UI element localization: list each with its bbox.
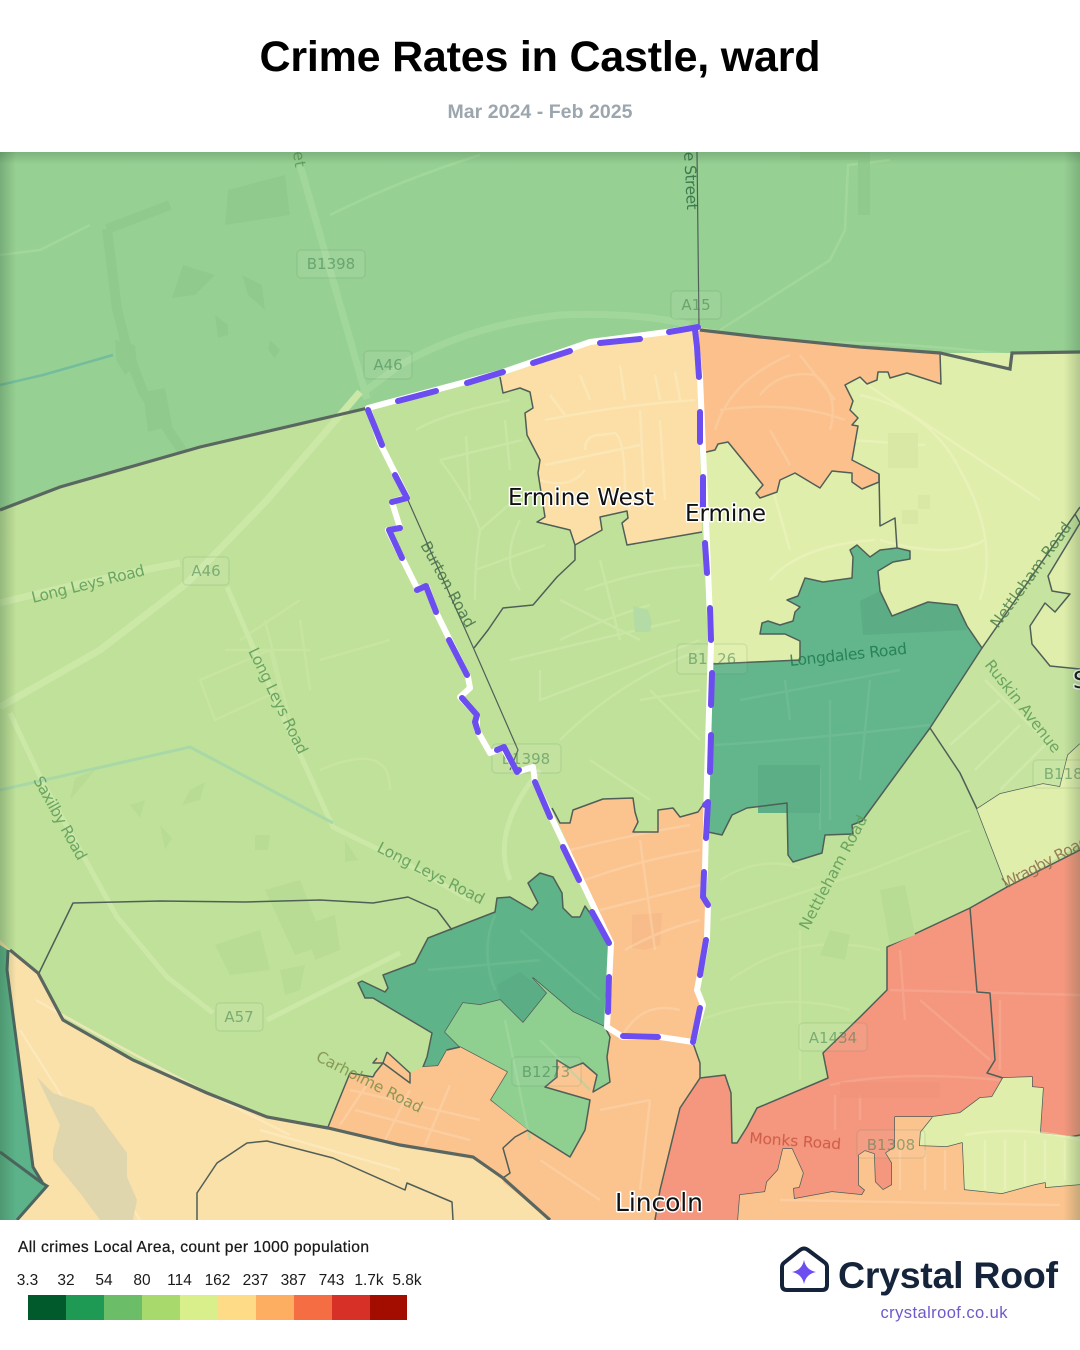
region boundary lines on main green: [39, 897, 452, 973]
legend colour scale: [28, 1295, 407, 1320]
road shields: A46: [191, 562, 221, 580]
icon: school building patch: [633, 606, 652, 632]
street name labels: Burton Road: [417, 538, 479, 631]
legend tick values: 743: [319, 1272, 344, 1289]
legend tick values: 5.8k: [392, 1272, 422, 1289]
region: Monks Road red wards: [655, 850, 1080, 1220]
street name labels: Nettleham Road: [796, 812, 871, 933]
ward boundary: purple dashes: [368, 327, 712, 1042]
road shields: B1308: [867, 1136, 915, 1154]
region: Ermine West pale orange ward: [474, 328, 702, 648]
title: Crime Rates in Castle, ward: [260, 33, 820, 81]
region: south dark-green ward: [358, 873, 611, 1067]
field patches: [824, 933, 915, 946]
region: Ermine orange ward: [698, 328, 941, 548]
legend tick values: 237: [243, 1272, 268, 1289]
region: south-centre orange ward: [503, 798, 707, 1220]
street name labels: et: [289, 150, 309, 168]
street name labels: Long Leys Road: [244, 645, 311, 757]
choropleth map panel: [0, 150, 1080, 1220]
thick district boundary: [0, 330, 1080, 1220]
legend tick values: 162: [205, 1272, 230, 1289]
region: east yellow-green wards: [706, 353, 1080, 668]
legend tick values: 1.7k: [354, 1272, 384, 1289]
region: mid-green ward: [445, 978, 610, 1157]
region: Carholme orange ward: [328, 1047, 528, 1178]
street name labels: Carholme Road: [313, 1048, 426, 1117]
street name labels: Long Leys Road: [374, 839, 487, 908]
region: south yellow sub-area boundary: [197, 1141, 453, 1220]
region: north rural low-crime area: [0, 152, 1080, 510]
place labels: [508, 485, 1080, 1217]
region: Ruskin Avenue ward: [930, 514, 1080, 887]
road shields: B1398: [502, 750, 550, 768]
map edge shading: [0, 152, 1080, 1220]
legend tick values: 3.3: [17, 1272, 38, 1289]
legend tick values: [17, 1272, 422, 1289]
ward boundary: white outline: [368, 327, 711, 1042]
road shields: B1126: [688, 650, 736, 668]
major roads on the main green: [0, 390, 542, 1022]
region: south-east yellow-green pocket: [919, 1077, 1080, 1194]
legend tick values: 80: [133, 1272, 151, 1289]
road shields: B1273: [522, 1063, 570, 1081]
region: north-west ward streets: [416, 400, 700, 800]
street name labels: Monks Road: [749, 1129, 842, 1153]
road shields: B1398: [307, 255, 355, 273]
place labels: Ermine: [685, 501, 766, 527]
street name labels: Nettleham Road: [987, 519, 1075, 631]
legend tick values: 32: [57, 1272, 75, 1289]
road shields: A15: [681, 296, 711, 314]
date range subtitle: Mar 2024 - Feb 2025: [448, 101, 633, 123]
street name labels: Ruskin Avenue: [981, 656, 1065, 757]
legend tick values: 387: [281, 1272, 306, 1289]
region: Longdales dark-green ward: [708, 507, 1080, 862]
lake: [37, 1077, 137, 1220]
legend heading: All crimes Local Area, count per 1000 population: [18, 1239, 369, 1256]
street name labels: Long Leys Road: [30, 561, 147, 607]
water channel: [0, 747, 333, 823]
road shields: A57: [224, 1008, 254, 1026]
street name labels: [30, 150, 1080, 1153]
brand name: Crystal Roof: [838, 1254, 1058, 1296]
road shields: A1434: [809, 1029, 857, 1047]
place labels: Ermine West: [508, 485, 654, 511]
website: crystalroof.co.uk: [880, 1304, 1008, 1322]
street name labels: Saxilby Road: [30, 773, 90, 863]
place labels: Lincoln: [615, 1188, 703, 1217]
legend tick values: 114: [167, 1272, 192, 1289]
region: south-east orange ward: [738, 1117, 1080, 1220]
legend tick values: 54: [95, 1272, 113, 1289]
street name labels: Longdales Road: [789, 640, 908, 670]
road shields: [183, 250, 1080, 1158]
region: south railway and lake area: [0, 940, 550, 1220]
road shields: A46: [373, 356, 403, 374]
region: south-east yellow-green area: [977, 744, 1080, 887]
icon: Crystal Roof house logo: [782, 1248, 827, 1290]
street name labels: e Street: [680, 151, 701, 210]
